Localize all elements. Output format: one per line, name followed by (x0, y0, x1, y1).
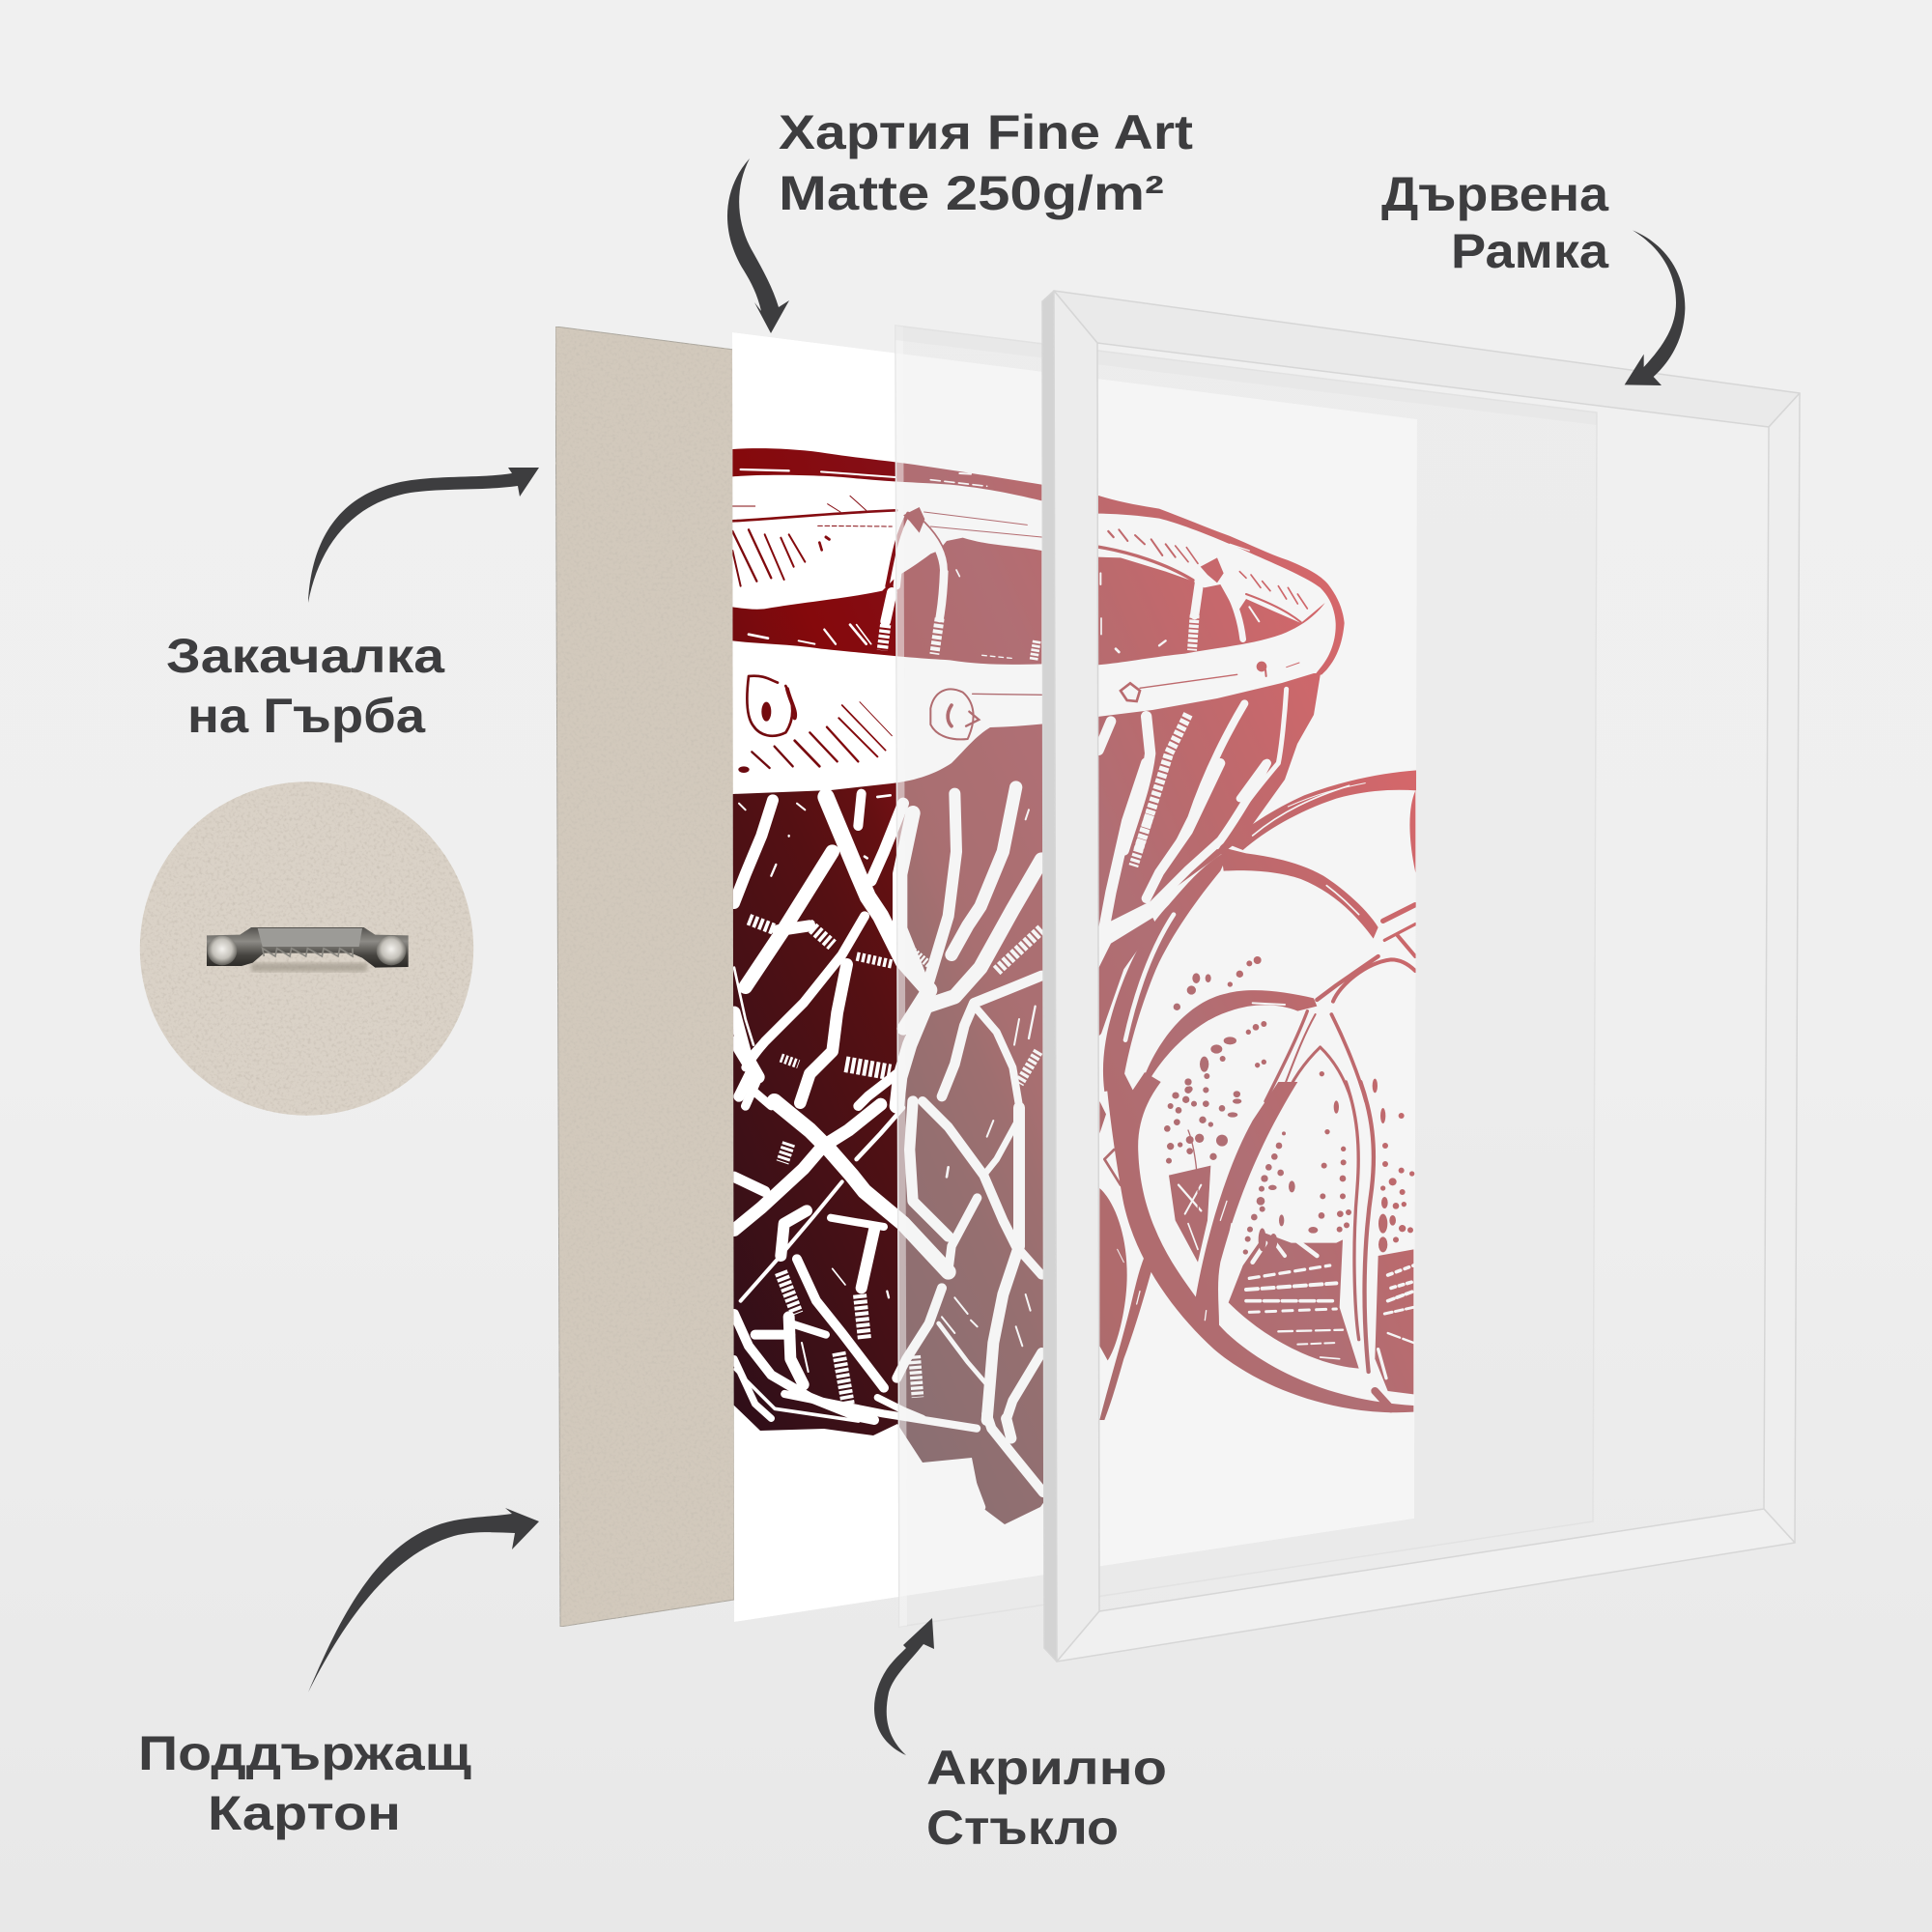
net strands right of the frame (1098, 689, 1287, 850)
label: support cardboard: Поддържащ (138, 1726, 471, 1780)
arrow: to paper (727, 158, 789, 333)
net silhouette and strands (732, 673, 1321, 1524)
basketball upper part (1098, 770, 1417, 1101)
label: wooden frame: Рамка (1451, 224, 1609, 278)
frame bottom bar (1057, 1509, 1795, 1662)
label: hanger on the back (166, 629, 445, 743)
label: wooden frame: Дървена (1381, 167, 1609, 221)
label: hanger on the back: на Гърба (187, 689, 426, 743)
cardboard backing panel (555, 327, 734, 1627)
cardboard circle (140, 781, 473, 1116)
frame left bar (1054, 291, 1099, 1662)
label: wooden frame (1381, 167, 1609, 278)
arrow: to acrylic (874, 1618, 934, 1755)
label: acrylic glass: Акрилно (926, 1741, 1167, 1795)
label: paper: Хартия Fine Art (779, 105, 1193, 159)
label: acrylic glass: Стъкло (926, 1801, 1119, 1855)
panel: paper with basketball hoop print (732, 332, 1417, 1622)
ball stipple lower (1164, 1087, 1414, 1255)
label: hanger on the back: Закачалка (166, 629, 445, 683)
arrow: to cardboard (308, 1508, 539, 1692)
arrow: to hanger side (308, 468, 539, 603)
frame side edge (1042, 291, 1057, 1662)
hoop rim right (1097, 496, 1345, 701)
paper sheet (732, 332, 1417, 1622)
wooden frame (1042, 291, 1800, 1662)
label: acrylic glass (926, 1741, 1167, 1855)
net fringe (735, 1370, 1043, 1507)
icon: sawtooth hanger (207, 927, 409, 972)
acrylic glass layer (895, 326, 1597, 1627)
hoop rim left (732, 448, 1041, 773)
frame right bar (1764, 393, 1800, 1543)
net strands below the crossing (734, 1101, 1041, 1420)
hanger detail circle (140, 781, 473, 1116)
arrow: to frame (1625, 230, 1685, 385)
basketball lower part (1099, 1072, 1414, 1420)
label: paper (779, 105, 1193, 220)
frame top bar (1054, 291, 1800, 427)
label: support cardboard (138, 1726, 471, 1840)
label: support cardboard: Картон (208, 1786, 401, 1840)
ball stipple upper (1172, 956, 1378, 1098)
label: paper: Matte 250g/m² (779, 166, 1164, 220)
net strands above the crossing (734, 787, 1041, 1106)
